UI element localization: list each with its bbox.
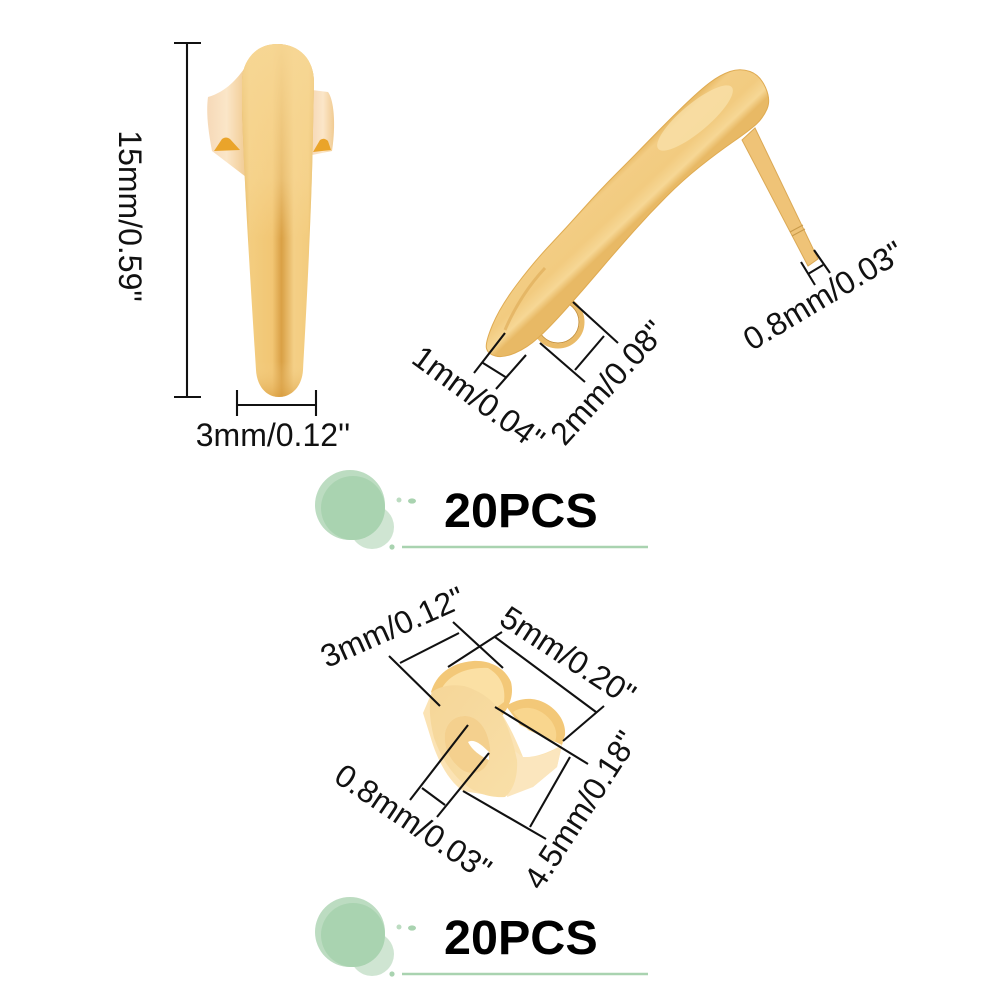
left rear lobe	[431, 661, 512, 716]
dimension: height 15mm: 15mm/0.59"	[112, 130, 148, 302]
badge: 20PCS bottom	[315, 897, 648, 977]
badge: 20PCS bottom: 20PCS	[444, 911, 598, 965]
badge: 20PCS top: 20PCS	[444, 484, 598, 538]
dimension: width 3mm	[196, 390, 350, 453]
bar ridge	[505, 268, 545, 330]
dimension: back 3mm	[315, 579, 503, 706]
dimension: back 5mm: 5mm/0.20"	[494, 599, 642, 713]
outer body	[423, 692, 562, 797]
plate hole	[445, 716, 490, 773]
dimension: width 3mm: 3mm/0.12''	[196, 417, 350, 453]
dimension: post 0.8mm: 0.8mm/0.03"	[737, 234, 910, 357]
badge: 20PCS top	[315, 470, 648, 550]
earring front view	[207, 44, 334, 397]
dimension: back 4.5mm	[463, 707, 645, 895]
dimension: 1mm: 1mm/0.04"	[406, 338, 551, 458]
post	[742, 128, 818, 266]
earring back	[423, 661, 565, 797]
dimension: back 5mm	[448, 599, 642, 741]
earring side view	[486, 70, 818, 357]
dimension: back 4.5mm: 4.5mm/0.18"	[517, 725, 645, 895]
dimension: height 15mm	[112, 43, 201, 397]
right rear lobe	[506, 699, 565, 745]
dimension: back 3mm: 3mm/0.12"	[315, 579, 470, 675]
loop	[534, 298, 582, 346]
dimension: back 0.8mm: 0.8mm/0.03"	[328, 757, 498, 887]
bar	[486, 70, 769, 357]
front plate	[430, 685, 517, 797]
bar highlight	[649, 76, 741, 160]
dimension: 2mm: 2mm/0.08"	[543, 314, 673, 452]
